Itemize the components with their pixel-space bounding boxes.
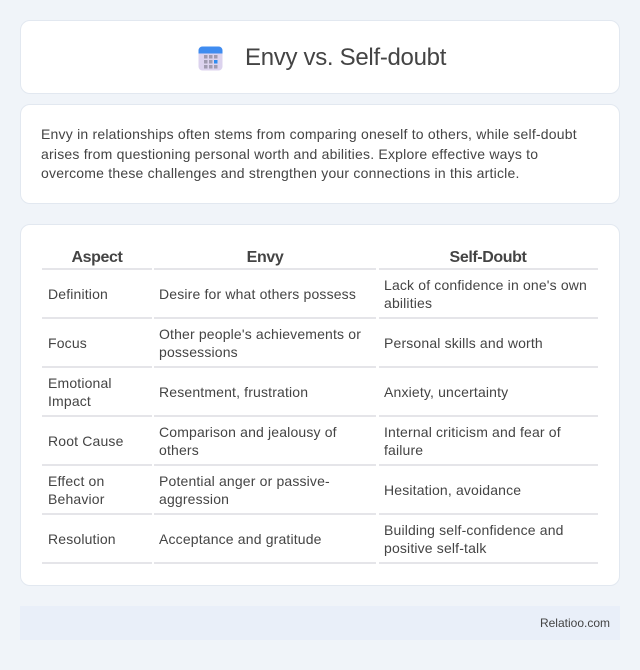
intro paragraph: arises from questioning personal worth and abilities. Explore effective ways to: [41, 146, 538, 162]
panel: intro text: [20, 104, 620, 204]
table header: [72, 249, 527, 266]
table header: Self-Doubt: [450, 249, 526, 266]
row: focus: Focus: [48, 335, 87, 351]
row: root cause: Internal criticism and fear of: [384, 424, 561, 440]
row: resolution: Acceptance and gratitude: [159, 531, 322, 547]
row: resolution: Resolution: [48, 531, 116, 547]
row: definition: abilities: [384, 295, 432, 311]
row: root cause: failure: [384, 442, 423, 458]
row: definition: Definition: [48, 286, 108, 302]
panel: title card: [20, 20, 620, 94]
footer brand: Relatioo.com: [540, 616, 610, 630]
panel: comparison table: [20, 224, 620, 586]
row: definition: Lack of confidence in one's own: [384, 277, 587, 293]
title: Envy vs. Self-doubt: [245, 44, 446, 71]
row: definition: Desire for what others possess: [159, 286, 356, 302]
table header: Aspect: [72, 249, 122, 266]
row: emotional impact: [48, 375, 508, 409]
intro paragraph: overcome these challenges and strengthen your connections in this article.: [41, 165, 520, 181]
row: emotional impact: Impact: [48, 393, 91, 409]
row: effect on behavior: [48, 473, 521, 507]
intro paragraph: [41, 126, 577, 181]
row: resolution: [48, 522, 564, 556]
row: effect on behavior: Effect on: [48, 473, 104, 489]
row: root cause: [48, 424, 561, 458]
row: emotional impact: Resentment, frustration: [159, 384, 308, 400]
row: resolution: positive self-talk: [384, 540, 486, 556]
row: focus: possessions: [159, 344, 238, 360]
row: focus: Personal skills and worth: [384, 335, 543, 351]
icon: calendar: [198, 46, 222, 70]
row: emotional impact: Anxiety, uncertainty: [384, 384, 508, 400]
table header: Envy: [247, 249, 283, 266]
row: effect on behavior: Hesitation, avoidance: [384, 482, 521, 498]
intro paragraph: Envy in relationships often stems from comparing oneself to others, while self-doubt: [41, 126, 577, 142]
row: root cause: others: [159, 442, 199, 458]
footer bar: [20, 606, 620, 640]
row: resolution: Building self-confidence and: [384, 522, 564, 538]
row: focus: Other people's achievements or: [159, 326, 361, 342]
row: effect on behavior: aggression: [159, 491, 229, 507]
row: focus: [48, 326, 543, 360]
row: root cause: Root Cause: [48, 433, 124, 449]
row: effect on behavior: Potential anger or passive-: [159, 473, 330, 489]
row: root cause: Comparison and jealousy of: [159, 424, 337, 440]
row: effect on behavior: Behavior: [48, 491, 105, 507]
row: definition: [48, 277, 587, 311]
row: emotional impact: Emotional: [48, 375, 112, 391]
